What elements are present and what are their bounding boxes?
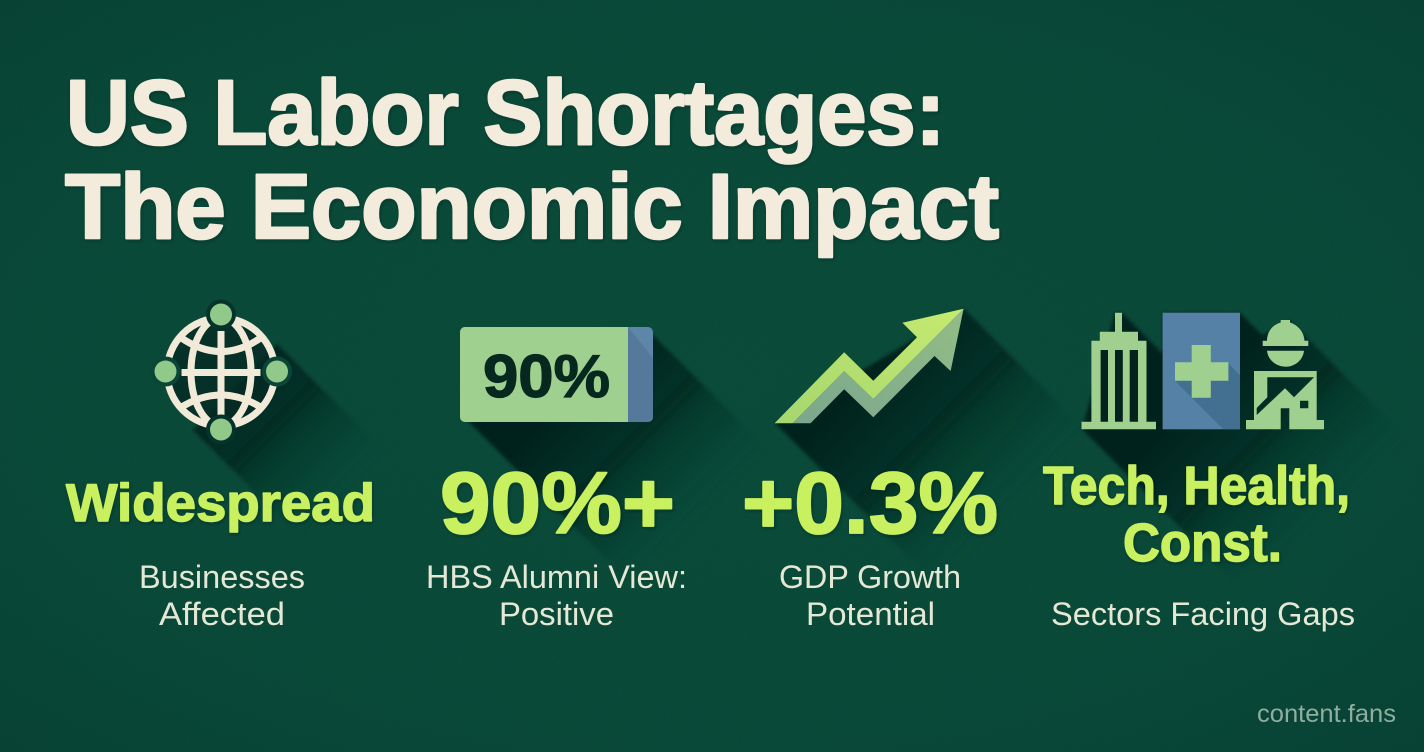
stat: 90%+ — [426, 455, 687, 632]
title: The Economic Impact — [65, 156, 999, 258]
icon: 90% badge — [460, 327, 803, 571]
tower — [1082, 313, 1156, 429]
icon: rising arrow — [774, 309, 1124, 583]
icon: globe with network nodes — [150, 300, 427, 580]
construction worker — [1246, 320, 1324, 429]
stat: widespread — [66, 474, 375, 632]
icon: 90% badge: 90% — [483, 343, 610, 410]
stat: GDP growth — [742, 455, 998, 632]
icon: sector buildings — [1082, 313, 1424, 579]
value: +0.3% — [742, 455, 998, 552]
title: US Labor Shortages: — [66, 62, 945, 164]
value: 90%+ — [440, 455, 675, 552]
caption: Businesses — [139, 559, 305, 595]
caption: Potential — [806, 596, 935, 632]
caption: Sectors Facing Gaps — [1051, 596, 1355, 632]
caption: GDP Growth — [779, 559, 961, 595]
stat: sectors — [1043, 456, 1355, 632]
caption: Affected — [159, 596, 285, 632]
value: Widespread — [66, 474, 375, 533]
title — [65, 62, 999, 258]
caption — [779, 559, 961, 632]
value — [1043, 456, 1350, 573]
value: Tech, Health, — [1043, 456, 1350, 516]
caption — [139, 559, 305, 632]
watermark: content.fans — [1257, 700, 1396, 728]
network nodes — [150, 300, 292, 444]
hospital panel — [1163, 313, 1240, 429]
caption: Positive — [499, 596, 614, 632]
caption: HBS Alumni View: — [426, 559, 687, 595]
value: Const. — [1123, 513, 1282, 573]
caption — [426, 559, 687, 632]
